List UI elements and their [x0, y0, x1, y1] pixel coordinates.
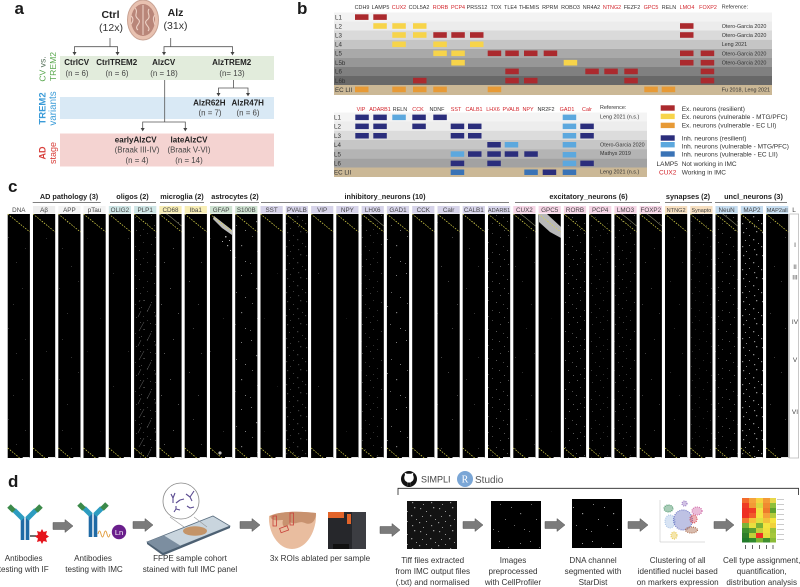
gene headers: NTNG2	[603, 5, 621, 11]
arrow	[545, 518, 565, 532]
group: AlzCV: AlzCV	[152, 58, 176, 67]
panel c: marker header labels: CD68	[162, 207, 179, 214]
gene headers: PVALB	[503, 107, 520, 113]
panel c: marker header labels: S100B	[237, 207, 256, 214]
gene headers: GPC5	[644, 5, 658, 11]
panel c: marker header labels: NeuN	[719, 207, 735, 214]
overlays: layer boundary dashes and scale bars	[8, 214, 788, 458]
cortical layer scale	[790, 207, 799, 458]
icon: antibody with fluorophore	[9, 506, 49, 544]
panel c: group headings: astrocytes (2)	[211, 192, 259, 201]
panel c: group headings: AD pathology (3)	[40, 192, 99, 201]
caption: FFPE	[143, 554, 237, 574]
references: Otero-Garcia 2020	[722, 61, 766, 67]
thumbnail: preprocessed image	[491, 501, 541, 549]
cortical layer scale: VI	[792, 409, 798, 416]
panel b: inhibitory table	[334, 105, 647, 177]
signal: GPC5 bright wedge	[539, 214, 561, 238]
legend: cell type colours: Inh. neurons (resilient)	[682, 135, 746, 142]
caption: DNA: segmented with	[565, 567, 621, 576]
row backgrounds	[334, 112, 647, 177]
cortical layer scale: L	[792, 207, 796, 214]
gene headers: FOXP2	[699, 5, 717, 11]
row label: TREM2 variants	[38, 91, 59, 126]
caption: antibodies IMC: testing with IMC	[65, 565, 123, 574]
gene headers: CUX2	[392, 5, 406, 11]
row label: CV vs TREM2: CV vs.	[38, 56, 48, 82]
arrow	[628, 518, 648, 532]
caption: clustering: Clustering of all	[650, 556, 706, 565]
legend: cell type colours	[656, 105, 789, 176]
caption: clustering: identified nuclei based	[638, 567, 718, 576]
layer labels: L1	[334, 114, 341, 122]
caption: DNA: StarDist	[579, 578, 608, 587]
caption: antibodies IMC	[65, 554, 123, 574]
caption: assignment	[723, 556, 800, 587]
panel b: excitatory table	[334, 4, 772, 95]
group: earlyAlzCV: earlyAlzCV	[115, 136, 157, 144]
layer labels: EC LII	[334, 170, 351, 176]
group: CtrlTREM2: (n = 6)	[105, 69, 129, 78]
panel c: marker header labels: LHX6	[365, 207, 381, 214]
caption: tiff: Tiff files extracted	[401, 556, 464, 565]
gene headers: ROBO3	[561, 5, 580, 11]
panel c: marker header labels: CALB1	[464, 207, 484, 214]
legend: cell type colours: CUX2	[659, 170, 677, 176]
gene headers: PCP4	[451, 5, 465, 11]
gene headers: GAD1	[560, 107, 574, 113]
tree connectors	[72, 38, 250, 131]
row label: TREM2 variants: variants	[48, 91, 59, 126]
panel c: marker header labels: SST	[265, 207, 278, 214]
group: CtrlCV	[64, 58, 90, 78]
layer labels: L5	[334, 151, 341, 158]
band: TREM2 variants	[60, 97, 274, 119]
caption: ROIs: 3x ROIs ablated per sample	[270, 554, 371, 563]
group: earlyAlzCV	[115, 136, 160, 165]
icon: FFPE slide with magnifier	[147, 483, 230, 556]
caption: clustering	[637, 556, 719, 587]
heading: Ctrl: (12x)	[99, 22, 123, 34]
heading: Alz	[164, 7, 187, 32]
row label: CV vs TREM2	[38, 52, 58, 82]
chart: heatmap	[742, 498, 784, 549]
panel c: group headings: excitatory_neurons (6)	[549, 192, 628, 201]
icon: tissue with ROIs	[269, 512, 316, 549]
panel c: marker header labels: Iba1	[190, 207, 202, 214]
icon: RStudio	[457, 471, 504, 487]
references: Leng 2021 (n.s.)	[600, 114, 639, 120]
references: Mathys 2019	[600, 151, 631, 157]
legend: cell type colours: Ex. neurons (vulnerable - MTG/PFC)	[682, 114, 788, 121]
gene headers: RELN	[662, 5, 676, 11]
row label: AD stage: stage	[48, 142, 58, 164]
caption: images: preprocessed	[488, 567, 538, 576]
gene headers: RORB	[433, 5, 449, 11]
group: AlzR47H: AlzR47H	[231, 98, 264, 108]
group: AlzCV: (n = 18)	[150, 69, 178, 78]
group: AlzR62H	[193, 98, 226, 118]
caption: DNA: DNA channel	[569, 556, 617, 565]
layer labels: L2	[335, 23, 342, 30]
thumbnail: tiff image	[407, 501, 457, 549]
panel c: marker header labels: FOXP2	[640, 207, 662, 214]
label: SIMPLI: SIMPLI	[421, 474, 451, 484]
icon: GitHub	[401, 471, 417, 487]
cortical layer scale: III	[792, 274, 798, 282]
row label: CV vs TREM2: TREM2	[48, 52, 58, 81]
legend: cell type colours: Inh. neurons (vulnerable - EC LII)	[682, 152, 778, 158]
arrow	[53, 520, 73, 532]
group: earlyAlzCV: (n = 4)	[125, 156, 149, 165]
layer labels: L1	[335, 14, 342, 21]
panel c: IMC image columns	[8, 214, 788, 458]
panel c: marker header labels: NPY	[341, 207, 355, 214]
group: lateAlzCV: (n = 14)	[175, 156, 203, 165]
panel c: marker header labels: Synapto	[692, 208, 711, 214]
layer labels: L5b	[335, 60, 346, 67]
panel c: marker header labels: Calr	[443, 207, 454, 214]
panel c: marker header labels	[12, 206, 788, 214]
group: AlzR47H	[231, 98, 264, 118]
layer labels: L2	[334, 124, 341, 130]
group: lateAlzCV: lateAlzCV	[171, 136, 208, 144]
layer labels: EC LII	[335, 87, 352, 94]
panel c: marker header labels: MAP2all	[767, 208, 788, 214]
gene headers: NR2F2	[537, 107, 555, 113]
group: lateAlzCV	[168, 136, 211, 165]
caption: tiff	[395, 556, 470, 587]
panel c: group headings: synapses (2)	[666, 192, 711, 201]
arrow	[380, 524, 400, 536]
heading: Ctrl: Ctrl	[101, 9, 120, 21]
gene headers: NDNF	[430, 107, 445, 113]
icon: RStudio: R	[462, 474, 469, 486]
panel c: marker header labels: Aβ	[40, 207, 48, 214]
gene headers: TOX	[491, 5, 502, 11]
references: Otero-Garcia 2020	[722, 24, 766, 30]
caption: clustering: on markers expression	[637, 578, 719, 587]
panel c: marker header labels: GFAP	[213, 207, 229, 214]
panel c: marker header labels: CUX2	[516, 207, 533, 214]
row label: AD stage: AD	[38, 146, 48, 160]
panel c: marker header labels: ADARB1	[488, 208, 510, 214]
caption: assignment: distribution analysis	[726, 578, 797, 587]
panel c: marker header labels: APP	[63, 207, 76, 214]
group: CtrlCV: (n = 6)	[65, 69, 89, 78]
panel c: group headings: uncl_neurons (3)	[724, 192, 783, 201]
legend: cell type colours: Not working in IMC	[682, 161, 737, 168]
gene headers: LAMP5	[372, 5, 389, 11]
group: earlyAlzCV: (Braak III-IV)	[115, 146, 160, 154]
panel c: marker header labels: PCP4	[592, 207, 609, 214]
legend: cell type colours: Working in IMC	[682, 170, 726, 176]
group: AlzCV	[150, 58, 178, 78]
arrow	[463, 518, 483, 532]
caption: images: with CellProfiler	[484, 578, 541, 587]
group: CtrlTREM2: CtrlTREM2	[96, 58, 138, 67]
gene headers	[355, 5, 717, 11]
references: Reference:	[600, 105, 626, 111]
panel c: marker header labels: CCK	[417, 207, 431, 214]
caption: tiff: (.txt) and normalised	[396, 578, 470, 587]
band: CV vs TREM2	[60, 56, 274, 80]
group: AlzTREM2: (n= 13)	[219, 69, 245, 78]
references: Otero-Garcia 2020	[722, 33, 766, 39]
panel c: marker header labels: GAD1	[389, 207, 407, 214]
legend: cell type colours: Inh. neurons (vulnerable - MTG/PFC)	[682, 143, 789, 150]
software bracket	[398, 488, 798, 495]
panel label d: d	[8, 472, 18, 491]
gene headers: THEMIS	[519, 5, 540, 11]
gene headers: NPY	[522, 107, 534, 113]
caption: tiff: from IMC output files	[395, 567, 470, 576]
row label: AD stage	[38, 142, 58, 164]
gene headers: TLE4	[504, 5, 517, 11]
layer labels: L4	[335, 42, 342, 49]
legend: cell type colours: LAMP5	[656, 161, 678, 168]
panel c: marker header labels: GPC5	[541, 207, 559, 214]
layer labels	[334, 114, 351, 176]
layer labels: L6	[334, 160, 341, 168]
gene headers: FEZF2	[624, 5, 640, 11]
layer labels: L5	[335, 51, 342, 58]
row backgrounds	[334, 12, 772, 95]
arrow	[714, 518, 734, 532]
group: AlzR47H: (n = 6)	[236, 108, 260, 118]
expression bars	[355, 14, 714, 92]
group: AlzR62H: AlzR62H	[193, 98, 226, 108]
panel c: marker header labels: LMO3	[617, 207, 635, 214]
gene headers: ADARB1	[369, 107, 391, 113]
band: AD stage	[60, 134, 274, 166]
caption: FFPE: FFPE sample cohort	[153, 554, 228, 563]
gene headers: RPRM	[542, 5, 558, 11]
panel c: marker header labels: OLIG2	[111, 207, 130, 214]
panel c: marker header labels: MAP2	[743, 207, 761, 214]
icon: imaging mass cytometer	[328, 512, 366, 549]
layer labels: L3	[334, 133, 341, 140]
panel c: group headings: microglia (2)	[160, 192, 204, 201]
signal: GFAP bright band	[213, 216, 232, 455]
cortical layer scale: V	[793, 357, 798, 364]
gene headers: SST	[451, 107, 462, 113]
arrow	[133, 518, 153, 532]
arrow	[240, 518, 260, 532]
references: Otero-Garcia 2020	[600, 142, 645, 148]
caption: images	[484, 556, 541, 587]
panel c: group headings: inhibitory_neurons (10)	[344, 192, 426, 201]
thumbnail: segmented DNA	[572, 499, 622, 548]
references: Leng 2021	[722, 42, 747, 48]
icon: antibody with lanthanide: Ln	[115, 528, 123, 537]
gene headers: CDH9	[355, 5, 369, 11]
caption: antibodies IF: testing with IF	[0, 565, 49, 574]
gene headers: COL5A2	[409, 5, 429, 11]
group: AlzR62H: (n = 7)	[198, 108, 222, 118]
panel a: cohort tree	[38, 0, 274, 166]
references: Otero-Garcia 2020	[722, 52, 766, 58]
heading: Alz: Alz	[168, 7, 183, 19]
chart: UMAP clusters	[660, 500, 705, 542]
layer labels: L6b	[335, 78, 346, 85]
gene headers: Calr	[582, 107, 592, 113]
cortical layer scale: II	[793, 264, 797, 271]
group: CtrlCV: CtrlCV	[64, 58, 90, 67]
panel label c: c	[8, 177, 17, 196]
references	[722, 4, 770, 94]
gene headers: LHX6	[486, 107, 500, 113]
references	[600, 105, 645, 176]
group: AlzTREM2	[212, 58, 252, 78]
panel c: marker header labels: DNA	[12, 207, 26, 214]
caption: antibodies IF: Antibodies	[5, 554, 43, 563]
panel c: marker header labels: RORB	[566, 207, 584, 214]
legend: cell type colours: Ex. neurons (resilient)	[682, 106, 745, 113]
references: Reference:	[722, 4, 748, 10]
heading: Alz: (31x)	[164, 20, 187, 32]
panel c: marker header labels: VIP	[317, 207, 327, 214]
caption: assignment: Cell type assignment,	[723, 556, 800, 565]
panel c: group headings	[33, 192, 787, 202]
references: Leng 2021 (n.s.)	[600, 170, 639, 176]
panel c: marker header labels: PLP1	[137, 207, 153, 214]
group: lateAlzCV: (Braak V-VI)	[168, 146, 211, 154]
gene headers: RELN	[393, 107, 407, 113]
references: Fu 2018, Leng 2021	[722, 88, 770, 94]
panel c: marker header labels: NTNG2	[667, 208, 686, 214]
gene headers: NR4A2	[583, 5, 600, 11]
layer labels	[335, 14, 352, 94]
expression bars	[355, 115, 594, 175]
caption: images: Images	[500, 556, 526, 565]
caption: DNA	[565, 556, 621, 587]
caption: antibodies IF	[0, 554, 49, 574]
gene headers: CCK	[412, 107, 424, 113]
row label: TREM2 variants: TREM2	[38, 92, 48, 125]
panel c: marker header labels: PVALB	[287, 207, 307, 214]
panel c: marker header labels: pTau	[88, 207, 102, 214]
group: AlzTREM2: AlzTREM2	[212, 58, 252, 67]
gene headers: CALB1	[465, 107, 483, 113]
caption: assignment: quantification,	[737, 567, 787, 576]
heading: Ctrl	[99, 9, 123, 34]
layer labels: L4	[334, 142, 341, 149]
panel c: group headings: oligos (2)	[116, 192, 149, 201]
cortical layer scale: IV	[792, 319, 799, 326]
layer labels: L6	[335, 69, 342, 76]
caption: FFPE: stained with full IMC panel	[143, 565, 237, 574]
layer labels: L3	[335, 32, 342, 40]
icon: antibody with lanthanide	[79, 504, 126, 539]
cortical layer scale: I	[794, 242, 796, 249]
gene headers: VIP	[357, 107, 366, 113]
group: CtrlTREM2	[96, 58, 138, 78]
gene headers	[357, 107, 592, 113]
caption: antibodies IMC: Antibodies	[74, 554, 112, 563]
icon: RStudio: Studio	[475, 475, 504, 486]
legend: cell type colours: Ex. neurons (vulnerable - EC LII)	[682, 122, 776, 130]
icon: brain	[128, 0, 158, 40]
gene headers: PRSS12	[467, 5, 487, 11]
gene headers: LMO4	[680, 5, 694, 11]
